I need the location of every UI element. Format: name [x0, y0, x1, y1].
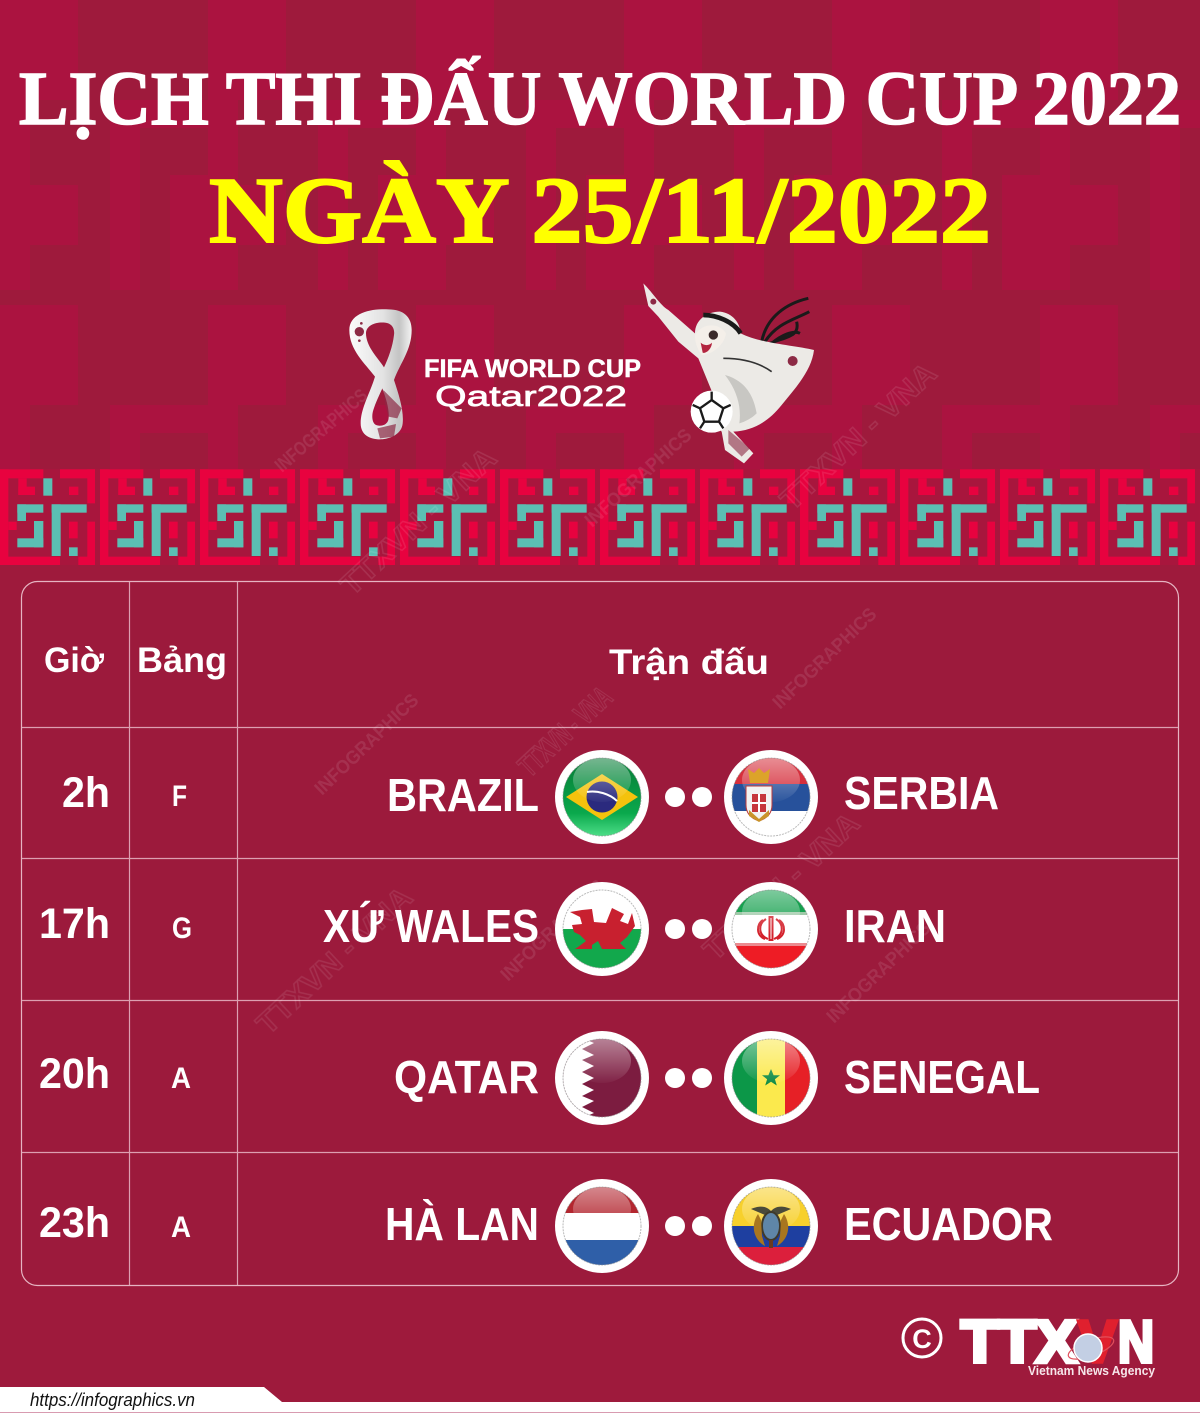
title: LỊCH THI ĐẤU WORLD CUP 2022 — [19, 56, 1181, 141]
agency name: Vietnam News Agency — [1028, 1363, 1156, 1378]
group: F — [172, 780, 187, 813]
table header — [44, 641, 769, 682]
row 2: Wales vs Iran — [39, 882, 946, 976]
watermarks: TTXVN - VNA — [250, 881, 419, 1041]
team: Netherlands: HÀ LAN — [385, 1198, 539, 1250]
group: A — [171, 1062, 191, 1095]
header: match: Trận đấu — [609, 643, 769, 682]
time: 20h — [39, 1050, 110, 1098]
watermarks: TTXVN - VNA — [697, 807, 866, 967]
flag: Wales — [555, 882, 649, 976]
watermarks: INFOGRAPHICS — [581, 425, 696, 532]
vs dots — [665, 1068, 712, 1088]
team: Serbia: SERBIA — [844, 767, 999, 819]
team: Senegal: SENEGAL — [844, 1051, 1040, 1103]
time: 2h — [62, 769, 110, 817]
date heading: NGÀY 25/11/2022 — [209, 159, 991, 263]
watermarks: TTXVN - VNA — [774, 357, 943, 517]
vs dots — [665, 787, 712, 807]
wordmark line 1: FIFA WORLD CUP — [424, 355, 641, 383]
vs dots — [665, 1216, 712, 1236]
flag: Serbia — [724, 750, 818, 844]
group: A — [171, 1211, 191, 1244]
flag: Qatar — [555, 1031, 649, 1125]
group: G — [172, 912, 192, 945]
flag: Iran — [724, 882, 818, 976]
row 1: Brazil vs Serbia — [62, 750, 999, 844]
watermarks — [250, 357, 943, 1041]
copyright symbol — [903, 1319, 941, 1357]
team: Iran: IRAN — [844, 900, 946, 952]
team: Ecuador: ECUADOR — [844, 1198, 1053, 1250]
time: 23h — [39, 1199, 110, 1247]
flag: Ecuador — [724, 1179, 818, 1273]
wordmark line 2: Qatar2022 — [435, 381, 627, 413]
watermarks: INFOGRAPHICS — [311, 690, 423, 800]
source url: https://infographics.vn — [30, 1390, 195, 1410]
icon: globe — [1066, 1332, 1116, 1364]
header: time: Giờ — [44, 641, 104, 680]
icon: tournament emblem — [349, 309, 412, 439]
row 3: Qatar vs Senegal — [39, 1031, 1040, 1125]
TTXVN logo — [961, 1309, 1156, 1378]
letters TTX: TTX — [961, 1309, 1077, 1375]
copyright symbol: C — [912, 1324, 932, 1354]
flag: Netherlands — [555, 1179, 649, 1273]
table panel — [22, 582, 1178, 1286]
watermarks: TTXVN - VNA — [334, 442, 503, 602]
time: 17h — [39, 900, 110, 948]
team: Qatar: QATAR — [394, 1051, 539, 1103]
decorative band — [0, 460, 1200, 580]
letter V: V — [1078, 1309, 1117, 1375]
flag: Brazil — [555, 750, 649, 844]
letter N: N — [1118, 1309, 1154, 1375]
icon: mascot La'eeb — [643, 283, 814, 463]
vs dots — [665, 919, 712, 939]
row 4: Netherlands vs Ecuador — [39, 1179, 1053, 1273]
watermarks: INFOGRAPHICS — [769, 604, 881, 714]
header: group: Bảng — [137, 641, 227, 680]
footer strip — [0, 1387, 1200, 1413]
team: Brazil: BRAZIL — [387, 769, 539, 821]
flag: Senegal — [724, 1031, 818, 1125]
watermarks: INFOGRAPHICS — [272, 385, 372, 477]
watermarks: INFOGRAPHICS — [823, 918, 935, 1028]
watermarks: INFOGRAPHICS — [497, 876, 609, 986]
watermarks: TTXVN - VNA — [512, 681, 619, 783]
team: Wales: XỨ WALES — [323, 900, 539, 952]
logo: FIFA World Cup Qatar 2022 — [349, 309, 641, 439]
